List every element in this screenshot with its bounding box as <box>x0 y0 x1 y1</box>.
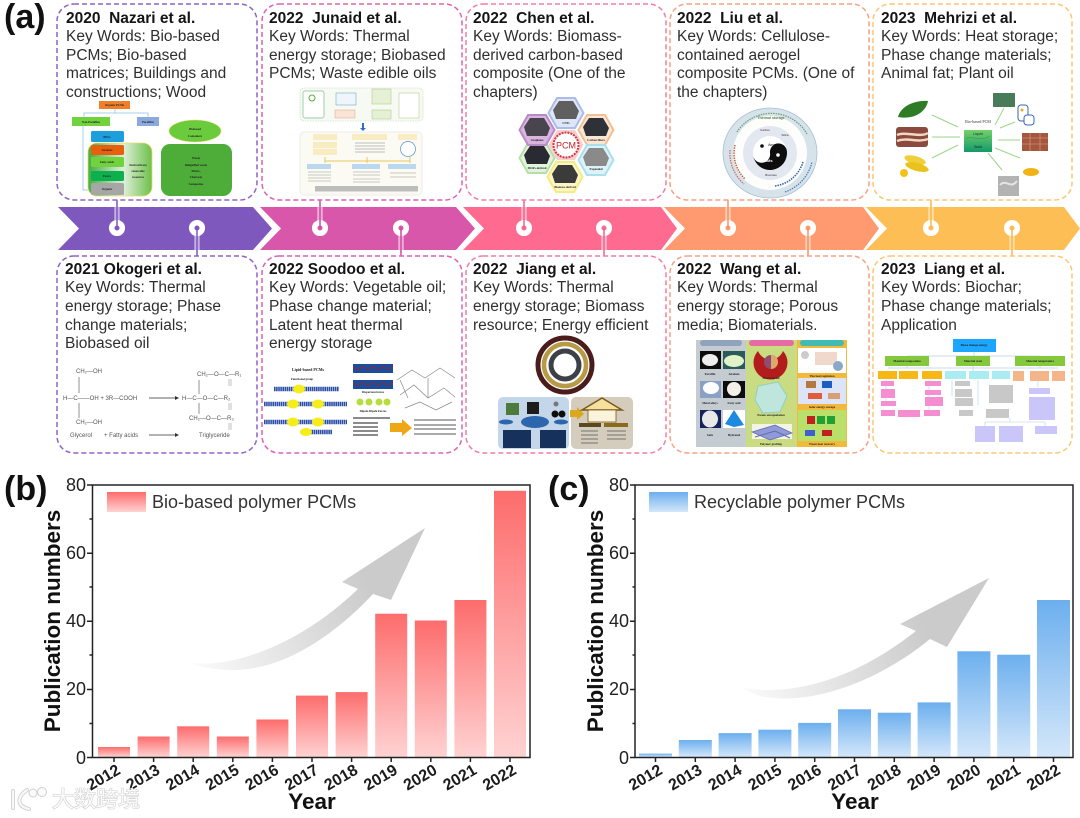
keywords: Phase change materials; <box>881 47 1052 64</box>
figure: organic PCM tree: Fibers, <box>192 169 201 173</box>
card frame <box>670 256 869 453</box>
figure: organic PCM tree <box>72 101 232 196</box>
keywords: change materials; <box>65 317 187 334</box>
y axis title: Publication numbers <box>583 510 608 732</box>
y axis tick labels: 20 <box>66 679 86 699</box>
x axis year labels: 2015 <box>203 762 242 794</box>
y axis tick labels: 40 <box>609 611 629 631</box>
arrow segment: yellow <box>866 207 1080 250</box>
keywords: Key Words: Biochar; <box>881 279 1022 296</box>
y axis tick labels <box>609 475 629 768</box>
figure: glycerol esterification: + Fatty acids <box>104 433 138 439</box>
heading: 2022 Soodoo et al. <box>269 261 405 278</box>
figure: PCMs, shape-stable PCMs, applications: Paraffin <box>705 372 716 376</box>
x axis title: Year <box>831 789 879 814</box>
card frame <box>466 4 666 200</box>
figure: research framework <box>300 88 423 195</box>
figure: phase change storage flowchart: Phase change energy <box>961 343 988 347</box>
figure: glycerol esterification <box>63 369 241 439</box>
x axis year labels: 2016 <box>785 762 825 794</box>
card frame <box>57 256 257 453</box>
x axis year labels: 2014 <box>706 762 745 794</box>
figure: lipid-based PCMs: Dipole-Dipole Forces <box>360 409 387 413</box>
y axis tick labels: 40 <box>66 611 86 631</box>
keywords: Application <box>881 317 957 334</box>
panel: 2020 Nazari <box>57 4 257 200</box>
keywords: constructions; Wood <box>66 84 206 101</box>
x axis year labels: 2017 <box>825 762 865 794</box>
figure: carbon hexagon wheel: Expanded <box>589 167 603 171</box>
x axis year labels: 2018 <box>865 762 904 794</box>
keywords: Key Words: Biomass- <box>473 28 622 45</box>
x axis year labels: 2013 <box>124 762 163 794</box>
keywords: Key Words: Thermal <box>269 28 410 45</box>
figure: glycerol esterification: H—C——OH + 3R—COOH <box>63 396 137 402</box>
legend: Bio-based polymer PCMs <box>152 492 356 512</box>
x axis year labels: 2019 <box>361 762 401 794</box>
figure: aerogel PCM ring <box>723 108 817 198</box>
figure: PCMs, shape-stable PCMs, applications: Alcohols <box>728 372 740 376</box>
axes frame <box>630 485 1073 762</box>
panel label (c): (c) <box>548 470 590 508</box>
heading: 2022 Chen et al. <box>473 10 594 27</box>
keywords: Animal fat; Plant oil <box>881 65 1014 82</box>
figure: organic PCM tree: Non-Paraffins <box>82 120 101 124</box>
heading: 2022 Wang et al. <box>677 261 801 278</box>
y axis tick labels <box>66 475 86 768</box>
figure: carbon hexagon wheel: PCM <box>556 140 576 150</box>
figure: bio-based PCM sources and uses: Liquid <box>973 132 983 136</box>
keywords: Key Words: Cellulose- <box>677 28 830 45</box>
figure: carbon hexagon wheel: Biomass-derived <box>554 185 576 189</box>
figure: aerogel PCM ring: Carbon <box>760 128 770 132</box>
bars <box>98 491 526 757</box>
figure: phase change storage flowchart: Material composition <box>893 359 921 363</box>
panel: 2022 Jiang <box>466 256 666 453</box>
figure: organic PCM tree: renewable <box>131 169 145 173</box>
figure: bio-based PCM sources and uses: Solid <box>974 145 982 149</box>
figure: bio-based PCM sources and uses <box>896 93 1048 196</box>
card frame <box>873 256 1072 453</box>
figure: PCMs, shape-stable PCMs, applications: Solar energy storage <box>809 405 836 409</box>
keywords: energy storage <box>269 335 372 352</box>
figure: PCMs, shape-stable PCMs, applications: Thermal regulation <box>809 374 835 378</box>
bars <box>639 600 1070 757</box>
y axis tick labels: 20 <box>609 679 629 699</box>
figure: carbon hexagon wheel: Carbon fibers <box>587 138 606 142</box>
heading: 2020 Nazari et al. <box>66 10 195 27</box>
figure: glycerol esterification: CH₂—O—C—R₃ <box>189 416 234 422</box>
figure: carbon hexagon wheel <box>520 98 614 192</box>
panel: 2022 Liu <box>670 4 869 200</box>
figure: organic PCM tree: Organic PCMs <box>105 103 125 107</box>
keywords: Key Words: Thermal <box>65 279 206 296</box>
figure: phase change storage flowchart: Material temperature <box>1026 359 1055 363</box>
figure: organic PCM tree: Fatty acids <box>100 160 115 164</box>
figure: glycerol esterification: Triglyceride <box>199 433 230 439</box>
x axis year labels: 2017 <box>282 762 322 794</box>
heading: 2022 Jiang et al. <box>473 261 596 278</box>
figure: lipid-based PCMs: Lipid-based PCMs <box>292 367 324 372</box>
x axis year labels: 2012 <box>84 762 124 794</box>
figure: glycerol esterification: CH₂—OH <box>76 369 102 375</box>
figure: glycerol esterification: CH₂—OH <box>76 420 102 426</box>
card frame <box>262 256 462 453</box>
panel: 2023 Mehrizi <box>873 4 1072 200</box>
chart: recyclable polymer PCMs <box>583 475 1073 814</box>
keywords: the chapters) <box>677 84 767 101</box>
keywords: Latent heat thermal <box>269 317 403 334</box>
card frame <box>873 4 1072 200</box>
figure: PCMs, shape-stable PCMs, applications: Polymer grafting <box>760 442 782 446</box>
x axis year labels: 2012 <box>626 762 666 794</box>
heading: 2022 Liu et al. <box>677 10 783 27</box>
keywords: Key Words: Thermal <box>473 279 614 296</box>
keywords: media; Biomaterials. <box>677 317 817 334</box>
figure: PCMs, shape-stable PCMs, applications: Porous encapsulation <box>757 413 785 417</box>
figure: organic PCM tree: Delignified wood, <box>185 163 207 167</box>
arrow segment: magenta <box>260 207 475 250</box>
x axis year labels: 2021 <box>984 762 1024 794</box>
y axis tick labels: 60 <box>66 543 86 563</box>
figure: glycerol esterification: CH₂—O—C—R₁ <box>197 372 241 378</box>
keywords: derived carbon-based <box>473 47 623 64</box>
figure: organic PCM tree: PEGs <box>103 135 111 139</box>
keywords: energy storage; Phase <box>65 298 221 315</box>
figure: ring and house <box>498 338 633 449</box>
card frame <box>262 4 462 200</box>
arrow segment: orange <box>664 207 879 250</box>
figure: organic PCM tree: Esters <box>103 174 112 178</box>
heading: 2023 Mehrizi et al. <box>881 10 1017 27</box>
panel: 2021 Okogeri <box>57 256 257 453</box>
x axis year labels: 2020 <box>944 762 984 794</box>
x axis year labels: 2016 <box>242 762 282 794</box>
x axis year labels <box>84 762 520 794</box>
figure: aerogel PCM ring: Thermal storage <box>757 116 785 120</box>
card frame <box>466 256 666 453</box>
keywords: matrices; Buildings and <box>66 65 226 82</box>
y axis tick labels: 0 <box>76 748 86 768</box>
keywords: chapters) <box>473 84 538 101</box>
x axis year labels: 2018 <box>322 762 361 794</box>
keywords: Phase change materials; <box>881 298 1052 315</box>
keywords: resource; Energy efficient <box>473 317 649 334</box>
watermark: 大数跨境 <box>52 787 140 812</box>
keywords: Key Words: Vegetable oil; <box>269 279 446 296</box>
keywords: Key Words: Heat storage; <box>881 28 1058 45</box>
card frame <box>57 4 257 200</box>
heading: 2023 Liang et al. <box>881 261 1005 278</box>
y axis tick labels: 60 <box>609 543 629 563</box>
keywords: Key Words: Thermal <box>677 279 818 296</box>
x axis year labels: 2020 <box>401 762 440 794</box>
figure: lipid-based PCMs: Functional group <box>291 377 313 381</box>
timeline connectors and nodes <box>112 200 1017 256</box>
keywords: Biobased oil <box>65 335 149 352</box>
keywords: PCMs; Waste edible oils <box>269 65 437 82</box>
heading: 2021 Okogeri et al. <box>65 261 202 278</box>
x axis year labels: 2022 <box>1024 762 1064 794</box>
x axis year labels: 2022 <box>480 762 520 794</box>
panel: 2022 Junaid <box>262 4 462 200</box>
figure: PCMs, shape-stable PCMs, applications <box>696 340 847 447</box>
figure: carbon hexagon wheel: Graphene <box>531 138 544 142</box>
keywords: composite PCMs. (One of <box>677 65 855 82</box>
figure: bio-based PCM sources and uses: Bio-based PCM <box>965 119 991 124</box>
figure: PCMs, shape-stable PCMs, applications: Fatty acid <box>728 401 741 405</box>
figure: organic PCM tree: Organic <box>102 187 113 191</box>
figure: organic PCM tree: Derived from <box>129 163 147 167</box>
figure: lipid-based PCMs <box>264 364 456 436</box>
panel: 2023 Liang <box>873 256 1072 453</box>
legend: Recyclable polymer PCMs <box>694 492 905 512</box>
keywords: energy storage; Porous <box>677 298 838 315</box>
figure: organic PCM tree: resources <box>132 175 145 179</box>
figure: organic PCM tree: Composites <box>189 182 204 186</box>
figure: PCMs, shape-stable PCMs, applications: Microcapsule <box>762 376 780 380</box>
arrow segment: purple <box>58 207 272 250</box>
y axis tick labels: 0 <box>619 748 629 768</box>
heading: 2022 Junaid et al. <box>269 10 402 27</box>
watermark <box>13 787 140 812</box>
timeline arrows <box>58 207 1080 250</box>
figure: organic PCM tree: Alcohols <box>101 148 113 152</box>
figure: organic PCM tree: Biobased <box>189 127 201 131</box>
panel: 2022 Wang <box>670 256 869 453</box>
figure: aerogel PCM ring: PCMs <box>761 158 773 163</box>
keywords: energy storage; Biobased <box>269 47 446 64</box>
panel: 2022 Chen <box>466 4 666 200</box>
figure: PCMs, shape-stable PCMs, applications: Salts <box>707 433 714 437</box>
keywords: Key Words: Bio-based <box>66 28 220 45</box>
keywords: composite (One of the <box>473 65 626 82</box>
x axis year labels: 2014 <box>163 762 203 794</box>
figure: organic PCM tree: Containers <box>188 134 203 138</box>
figure: phase change storage flowchart: Material state <box>964 359 983 363</box>
arrow: rising trend <box>190 528 425 670</box>
x axis year labels: 2015 <box>745 762 785 794</box>
keywords: contained aerogel <box>677 47 800 64</box>
figure: aerogel PCM ring: Silica <box>781 133 789 137</box>
x axis year labels: 2013 <box>666 762 705 794</box>
y axis tick labels: 80 <box>609 475 629 495</box>
y axis tick labels: 80 <box>66 475 86 495</box>
figure: organic PCM tree: Paraffins <box>142 120 155 124</box>
axes frame <box>87 485 530 762</box>
arrow: rising trend <box>742 578 989 698</box>
figure: aerogel PCM ring: Aerogels <box>768 143 782 147</box>
figure: carbon hexagon wheel: MOFs-derived <box>528 166 547 170</box>
panel label (b): (b) <box>4 470 47 508</box>
x axis year labels <box>626 762 1064 794</box>
figure: lipid-based PCMs: Dispersion forces <box>362 390 385 394</box>
chart: bio-based polymer PCMs <box>40 475 530 814</box>
figure: organic PCM tree: Charcoal, <box>190 175 203 179</box>
figure: glycerol esterification: Glycerol <box>70 433 92 439</box>
figure: phase change storage flowchart <box>878 339 1065 442</box>
arrow segment: pink <box>463 207 677 250</box>
figure: PCMs, shape-stable PCMs, applications: Waste heat recovery <box>809 442 835 446</box>
y axis title: Publication numbers <box>40 510 65 732</box>
x axis year labels: 2019 <box>905 762 944 794</box>
keywords: Phase change material; <box>269 298 432 315</box>
keywords: PCMs; Bio-based <box>66 47 187 64</box>
figure: PCMs, shape-stable PCMs, applications: Hydrated <box>728 433 740 437</box>
keywords: energy storage; Biomass <box>473 298 645 315</box>
figure: PCMs, shape-stable PCMs, applications: Metal alloys <box>702 401 719 405</box>
x axis title: Year <box>288 789 336 814</box>
card frame <box>670 4 869 200</box>
figure: glycerol esterification: H—C—O—C—R₂ <box>182 396 231 402</box>
figure: aerogel PCM ring: Biomass <box>765 173 777 177</box>
panel: 2022 Soodoo <box>262 256 462 453</box>
figure: carbon hexagon wheel: CNTs <box>562 121 570 125</box>
x axis year labels: 2021 <box>440 762 480 794</box>
figure: organic PCM tree: Wood, <box>192 156 200 160</box>
